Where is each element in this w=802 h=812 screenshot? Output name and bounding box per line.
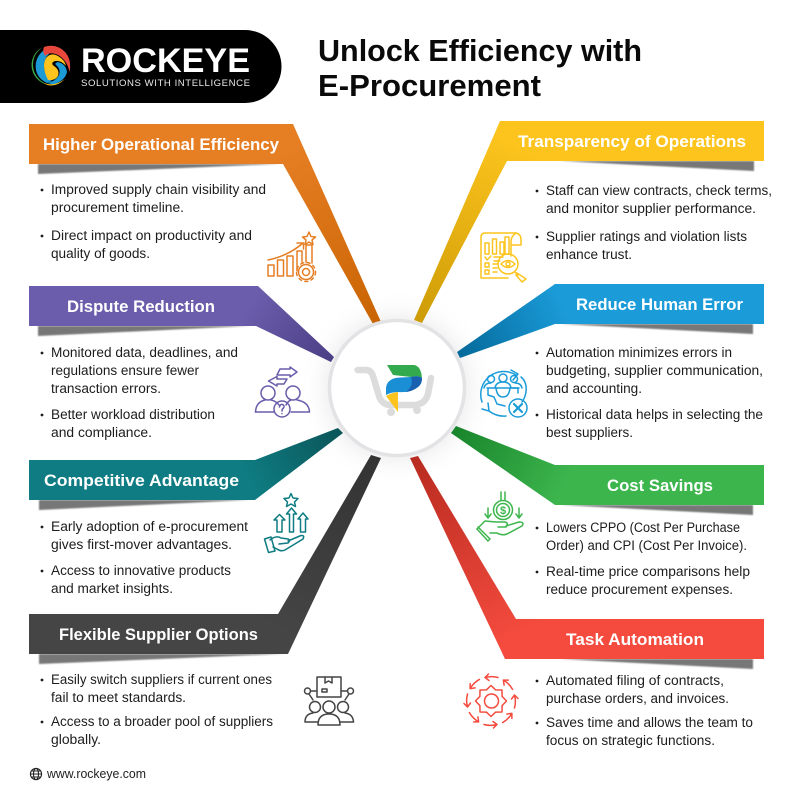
text block: and market insights. [51,581,173,596]
text block: focus on strategic functions. [546,733,715,748]
panel: flexible supplier options [29,455,381,747]
text block: fail to meet standards. [51,690,186,705]
icon: gear with circular arrows [464,674,518,728]
icon: chart with gear [268,232,316,282]
arm: purple [29,286,334,362]
text block: Early adoption of e-procurement [51,519,248,534]
text block [41,519,248,596]
text block: regulations ensure fewer [51,363,200,378]
text block: Order) and CPI (Cost Per Invoice). [546,538,747,553]
website footer: www.rockeye.com [46,767,146,781]
heading: Cost Savings [607,476,713,495]
heading: Transparency of Operations [518,132,746,151]
panel: higher operational efficiency [29,124,381,324]
text block [536,345,763,440]
text block: quality of goods. [51,246,150,261]
icon: suppliers and parcel [304,677,354,725]
title [318,33,642,103]
panel: competitive advantage [29,428,343,596]
text block: Direct impact on productivity and [51,228,252,243]
text block: reduce procurement expenses. [546,582,733,597]
icon: e-procurement cart logo [358,365,431,416]
text block: and accounting. [546,381,642,396]
arm: red [410,456,764,659]
panel: transparency of operations [414,121,772,323]
text block: Improved supply chain visibility and [51,182,266,197]
text block [536,183,772,262]
text block: gives first-mover advantages. [51,537,232,552]
text block: budgeting, supplier communication, [546,363,763,378]
text block [41,345,238,440]
text block: Access to innovative products [51,563,231,578]
arm: green [451,426,764,505]
text block [41,672,273,747]
icon: people dispute [256,367,310,417]
panel: cost savings [451,426,764,597]
panel: dispute reduction [29,286,334,440]
centre circle halo [297,288,497,488]
text block: Automation minimizes errors in [546,345,732,360]
icon: hand with dollar coin: $ [500,505,506,517]
heading: Competitive Advantage [44,471,239,490]
panel: task automation [410,456,764,748]
logo tagline: SOLUTIONS WITH INTELLIGENCE [81,78,250,89]
title: E-Procurement [318,68,541,103]
title: Unlock Efficiency with [318,33,642,68]
text block: Better workload distribution [51,407,215,422]
logo wordmark: ROCKEYE [81,42,250,80]
text block: Access to a broader pool of suppliers [51,714,273,729]
heading: Reduce Human Error [576,295,743,314]
text block: Staff can view contracts, check terms, [546,183,772,198]
text block: and compliance. [51,425,152,440]
text block: Easily switch suppliers if current ones [51,672,272,687]
icon: swirl logo [32,46,70,86]
text block: purchase orders, and invoices. [546,691,729,706]
arm: yellow [414,121,764,323]
heading: Task Automation [566,630,704,649]
text block [41,182,266,261]
text block [536,673,753,748]
heading: Higher Operational Efficiency [43,135,280,154]
panel: reduce human error [457,284,764,440]
icon: hand with rising arrows [264,494,308,552]
text block: Monitored data, deadlines, and [51,345,238,360]
icon: team with error mark [481,370,527,417]
icon: hand with dollar coin [477,492,523,541]
text block: procurement timeline. [51,200,184,215]
text block: Historical data helps in selecting the [546,407,763,422]
text block: best suppliers. [546,425,633,440]
text block: and monitor supplier performance. [546,201,756,216]
text block [536,520,750,597]
text block: Supplier ratings and violation lists [546,229,747,244]
text block: transaction errors. [51,381,161,396]
text block: Automated filing of contracts, [546,673,724,688]
arm: dark grey [29,455,381,654]
icon: globe [30,768,42,780]
icon: report with magnifier [481,233,526,282]
arm: teal [29,428,343,500]
text block: enhance trust. [546,247,632,262]
centre circle [330,320,464,456]
text block: Saves time and allows the team to [546,715,753,730]
arm: blue [457,284,764,358]
heading: Dispute Reduction [67,297,215,316]
text block: globally. [51,732,101,747]
header logo bar [0,30,282,103]
arm: orange [29,124,381,324]
text block: Lowers CPPO (Cost Per Purchase [546,520,740,535]
heading: Flexible Supplier Options [59,625,258,644]
text block: Real-time price comparisons help [546,564,750,579]
